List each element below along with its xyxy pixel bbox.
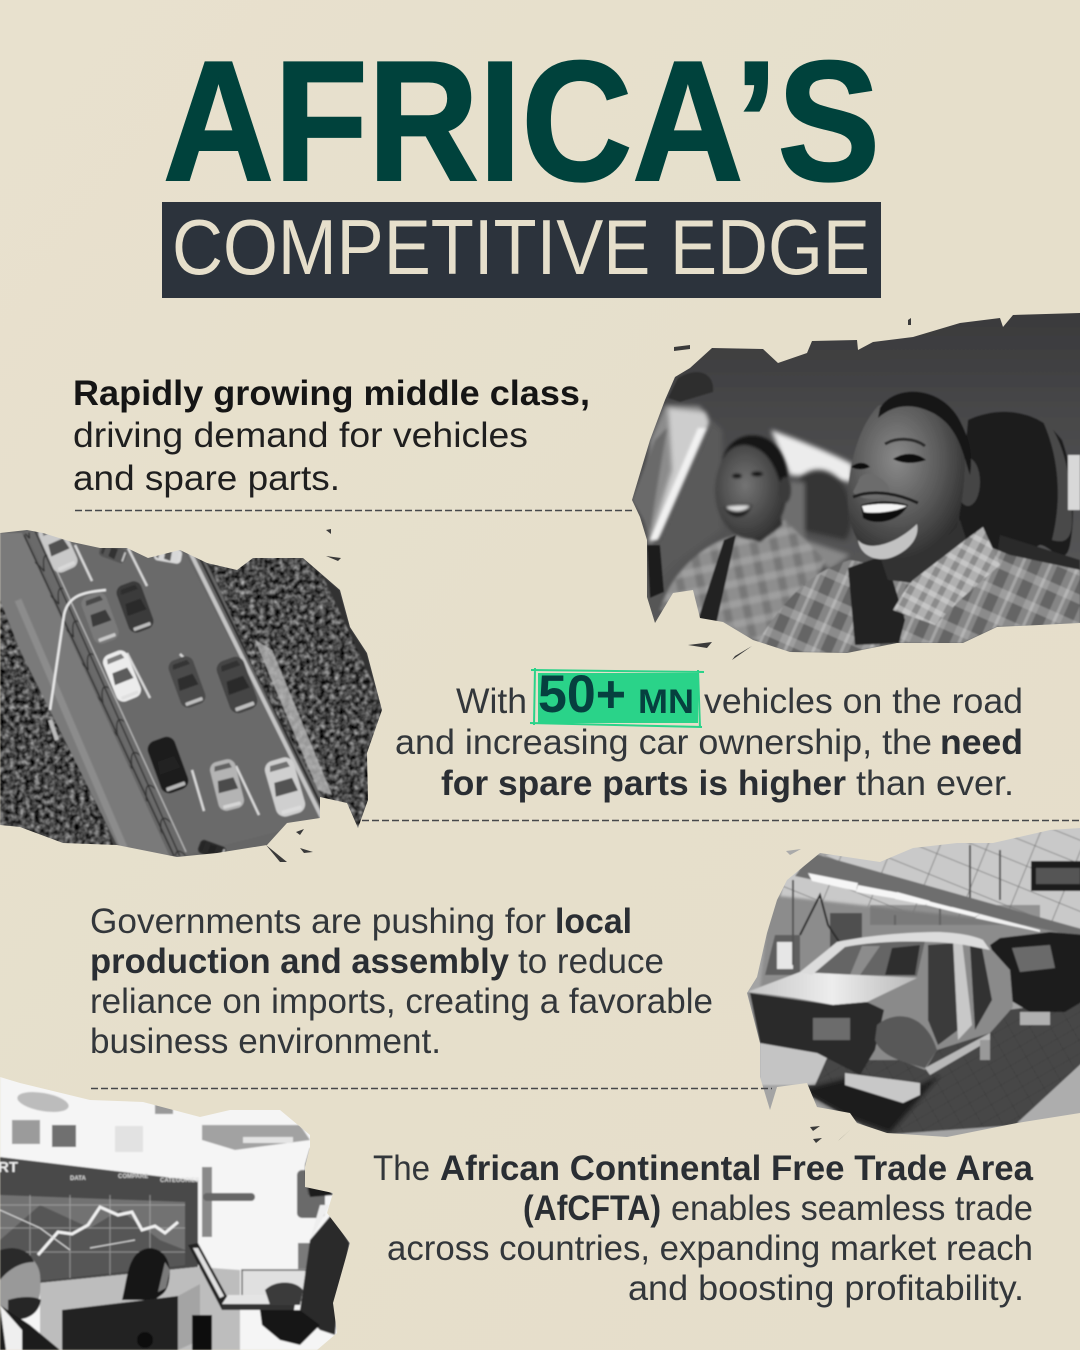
highlight: 50+ MN: MN — [638, 683, 694, 721]
text block: local production: reliance on imports, creating a favorable — [90, 982, 713, 1021]
divider 2 — [362, 820, 1080, 822]
data screen: COMPARE — [118, 1174, 148, 1180]
text block: local production: Governments are pushing for — [90, 902, 546, 941]
text block: AfCFTA — [373, 1149, 1034, 1308]
wall graphics — [12, 1089, 325, 1269]
left trees — [0, 601, 118, 845]
standing man in suit — [260, 1148, 350, 1345]
text block: AfCFTA: and boosting profitability. — [628, 1269, 1024, 1308]
driver ear — [961, 458, 981, 506]
text block: 50+ million vehicles — [395, 682, 1023, 803]
driver neck — [880, 520, 968, 583]
roof highlight — [800, 932, 990, 975]
text block: AfCFTA: (AfCFTA) — [523, 1189, 661, 1228]
text block: AfCFTA: across countries, expanding market reach — [387, 1229, 1033, 1268]
engine bay — [750, 993, 884, 1075]
lane lines — [75, 545, 259, 815]
window and door pillar — [647, 405, 708, 540]
text block: 50+ million vehicles: for spare parts is higher — [441, 764, 846, 803]
street lamp — [50, 590, 106, 710]
wheel arch — [875, 1016, 937, 1068]
text block: growing middle class — [73, 374, 590, 498]
text block: local production: production and assembly — [90, 942, 510, 981]
text block: local production: local — [555, 902, 632, 941]
divider 3 — [91, 1088, 772, 1090]
title: AFRICA'S: AFRICA’S — [163, 26, 880, 217]
driver head — [848, 402, 965, 561]
text block: AfCFTA: The — [373, 1149, 430, 1188]
highlight: 50+ MN: 50+ — [538, 665, 626, 724]
text block: local production: to reduce — [518, 942, 664, 981]
text block: local production: business environment. — [90, 1022, 441, 1061]
laptop — [188, 1243, 295, 1310]
second car on the line — [990, 932, 1080, 1025]
photo: aerial highway with cars — [0, 519, 390, 865]
text block: 50+ million vehicles: vehicles on the road — [704, 682, 1023, 721]
text block: 50+ million vehicles: than ever. — [856, 764, 1014, 803]
divider 1 — [75, 510, 635, 512]
door pillar — [953, 940, 972, 1040]
hood — [747, 972, 917, 1005]
text block: growing middle class: driving demand for vehicles — [73, 416, 528, 455]
cars — [36, 519, 307, 861]
text block: AfCFTA: African Continental Free Trade Area — [440, 1149, 1034, 1188]
woman seen from behind — [122, 1248, 170, 1300]
text block: 50+ million vehicles: With — [456, 682, 527, 721]
factory roof — [781, 828, 1080, 929]
data screen: CATEGORIES — [160, 1178, 199, 1184]
side lane — [0, 533, 170, 857]
lower desk area — [40, 1267, 240, 1350]
man with beard — [0, 1248, 60, 1350]
windshield — [807, 941, 925, 976]
driver headrest — [955, 412, 1073, 565]
driver collar — [893, 527, 1000, 625]
road surface — [25, 530, 323, 857]
photo: trading room with data screen — [0, 1070, 360, 1350]
sill and jig — [925, 1033, 990, 1075]
highlight: 50+ MN — [530, 665, 704, 728]
passenger seat headrest — [800, 470, 851, 540]
passenger head — [715, 435, 791, 542]
data screen — [0, 1157, 199, 1283]
data screen: DATA — [70, 1176, 86, 1182]
monitor — [1031, 861, 1080, 891]
factory background equipment — [760, 845, 1080, 990]
text block: growing middle class: Rapidly growing middle class, — [73, 374, 590, 413]
door openings — [928, 943, 958, 1045]
photo: car assembly line — [740, 820, 1080, 1140]
text block: 50+ million vehicles: and increasing car ownership, the — [395, 723, 932, 762]
passenger shirt — [660, 520, 825, 650]
banner: COMPETITIVE EDGE: COMPETITIVE EDGE — [172, 203, 870, 291]
photo: two smiling men in a car — [625, 310, 1080, 660]
driver beard — [858, 524, 917, 559]
text block: 50+ million vehicles: need — [940, 723, 1023, 762]
text block: growing middle class: and spare parts. — [73, 459, 340, 498]
overhead beam and lights — [795, 853, 1080, 938]
desktop monitor — [62, 1284, 212, 1350]
paper specks around photos — [266, 318, 911, 1143]
right road edge — [190, 552, 322, 818]
floor — [800, 1000, 1080, 1135]
text block: AfCFTA: enables seamless trade — [671, 1189, 1033, 1228]
rear window — [771, 430, 852, 482]
text block: local production — [90, 902, 713, 1061]
right trees — [206, 562, 377, 691]
driver shirt — [755, 545, 1080, 653]
fence — [22, 530, 186, 856]
car body shell — [747, 932, 1013, 1103]
